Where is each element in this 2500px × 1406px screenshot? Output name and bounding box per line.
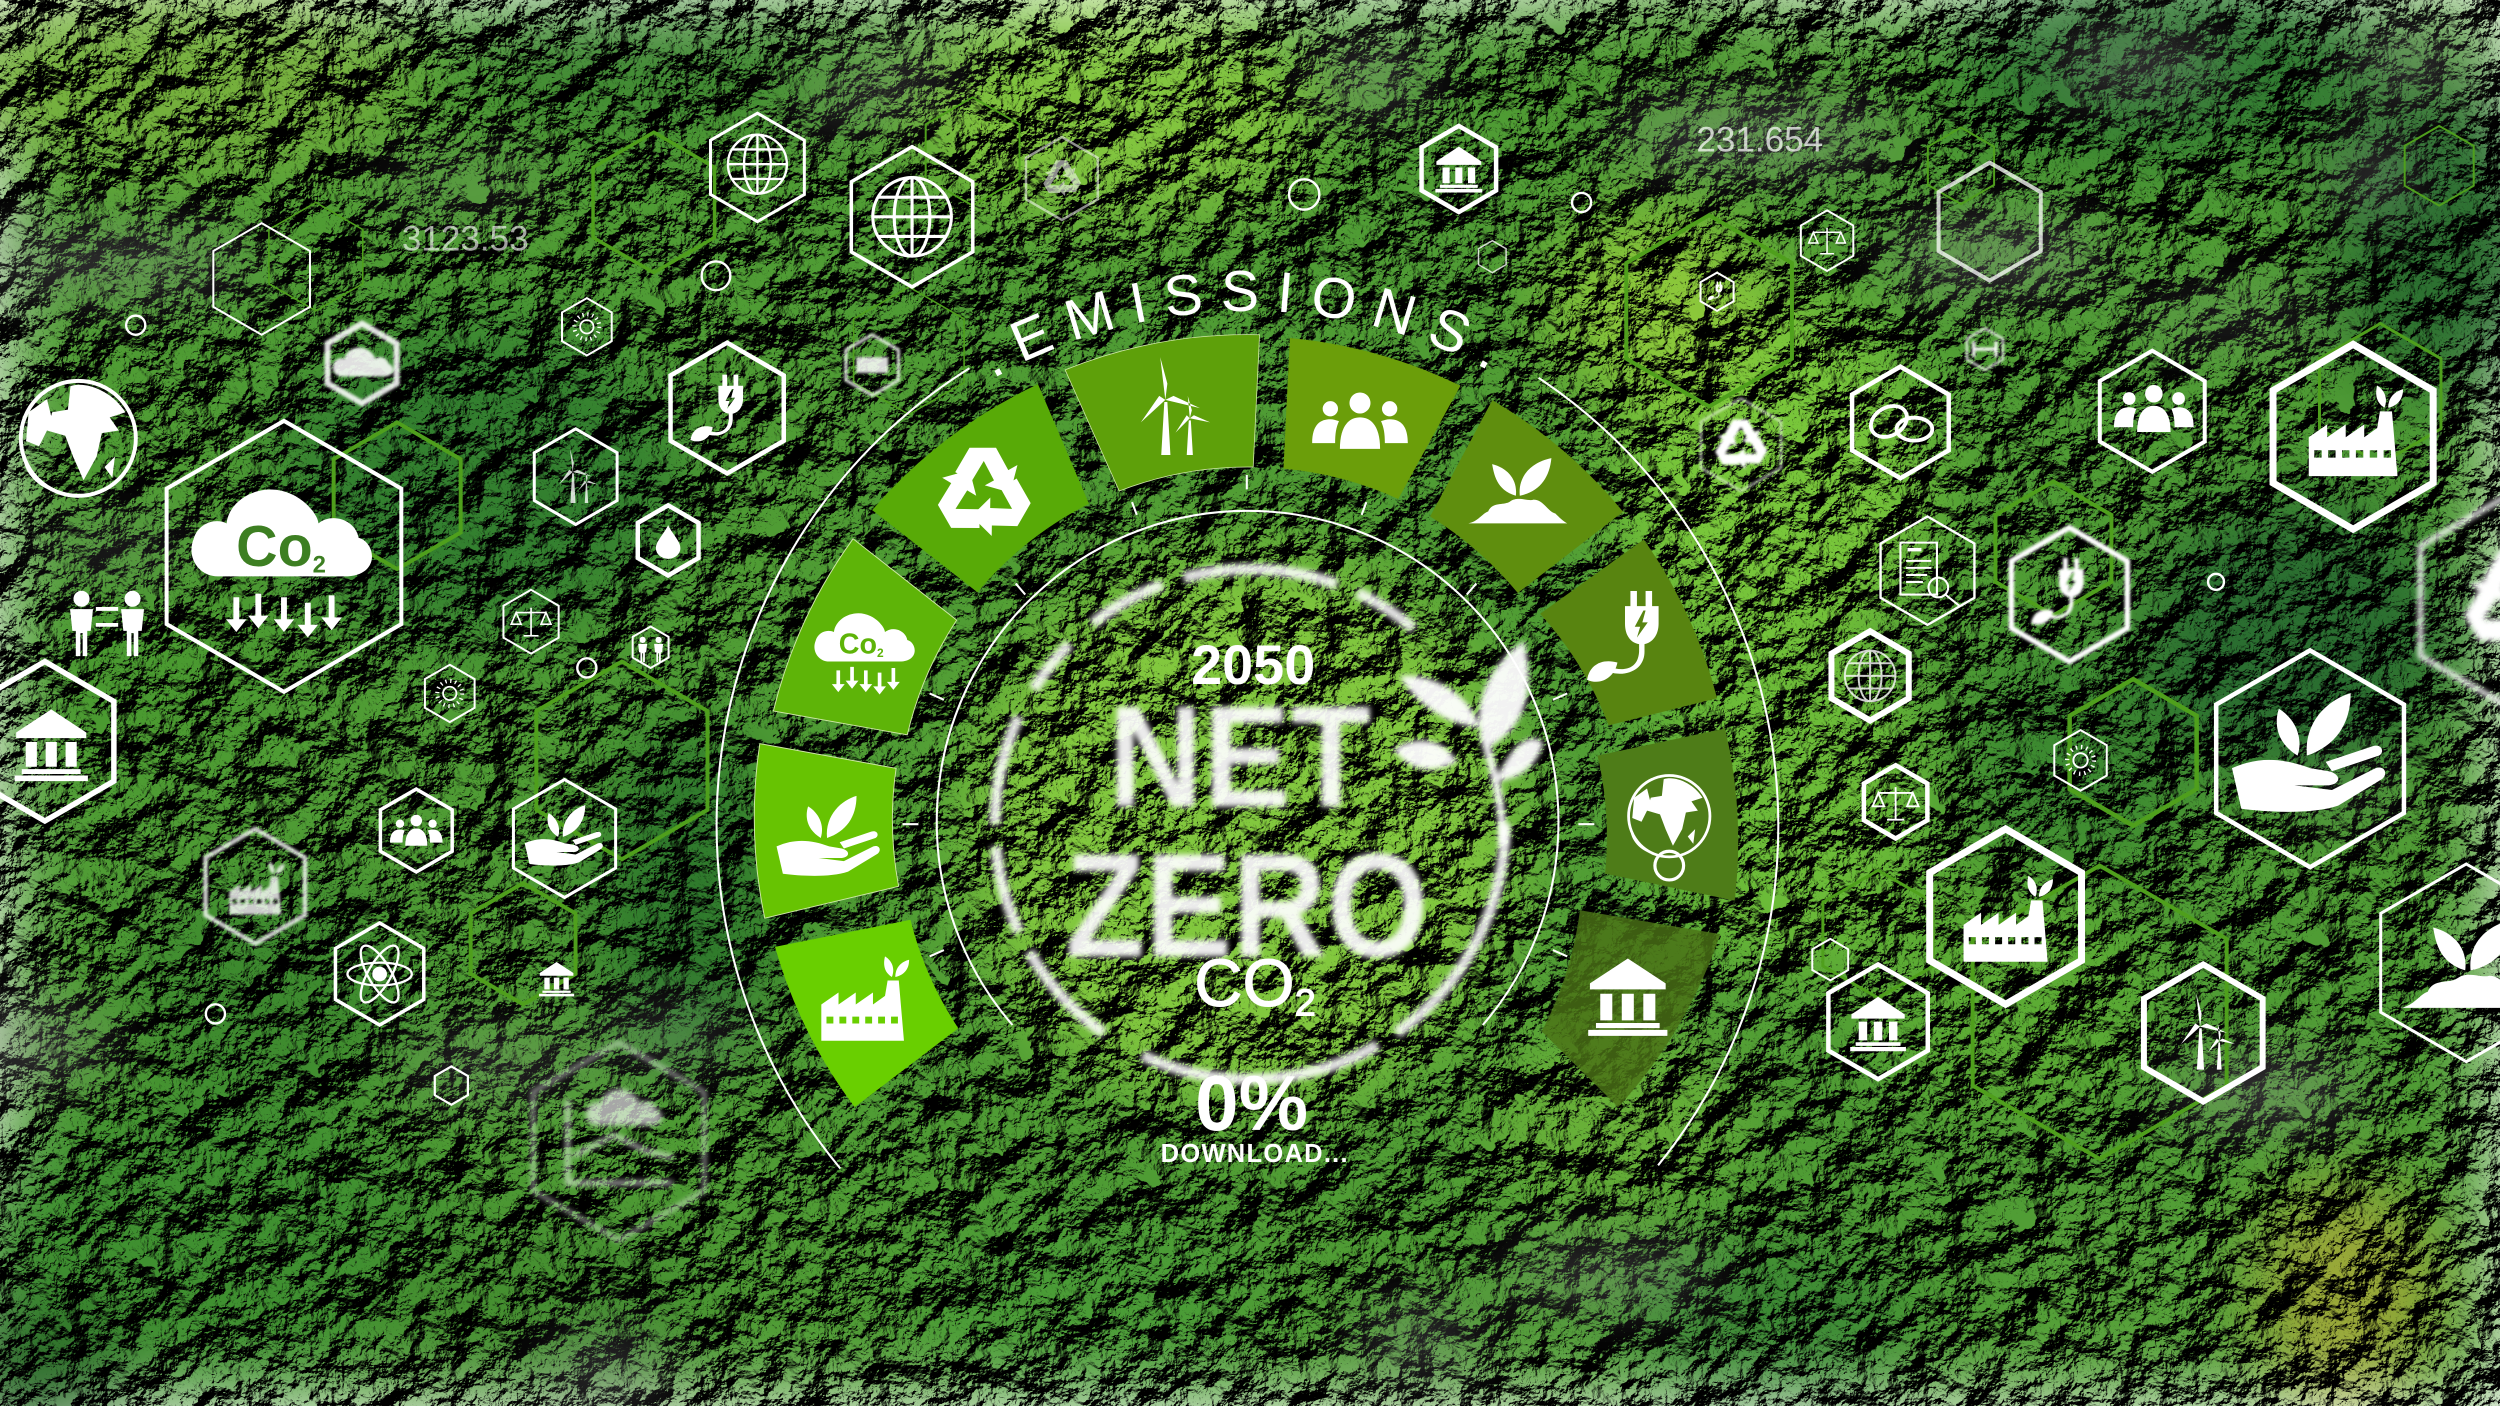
hexagon: wire globe [851,147,973,287]
hexagon: factory upper right [2273,344,2433,529]
hexagon: hand with leaves right [2216,650,2404,867]
hexagon: wire globe right [1831,631,1909,721]
segment: CO2 cloud [773,539,957,735]
hexagon: scale left [503,590,559,654]
hexagon: blurred cloud [328,324,397,403]
hexagon: water drop [638,505,699,575]
hexagon: tiny dumbbell [1967,328,2003,370]
title: 2050: 2050 [1191,633,1315,696]
hexagon: document inspection [1881,516,1974,625]
segment: recycling [872,384,1089,592]
blurred dashed ring around Net Zero [995,569,1505,1079]
segment: bank, semi transparent [1542,910,1720,1107]
hexagon: tiny sprout plug [1701,273,1734,311]
segment: CO2 cloud: 2 [877,646,884,660]
title: NET: NET [1108,676,1371,838]
hexagon: blurred recycling far right [2420,491,2500,711]
hexagon: bank top [1422,126,1496,212]
icon: globe on the left [21,381,136,496]
hexagon: people left [380,789,452,872]
number: 231.654: 231.654 [1696,120,1823,159]
hexagon: factory lower right [1930,829,2082,1004]
segment: CO2 cloud: Co [839,629,877,661]
outer thin ring [717,368,1778,1168]
title: CO2: 2 [1295,981,1316,1024]
hexagon: large CO2 cloud: 2 [313,551,326,578]
hexagon: large CO2 cloud [167,421,401,692]
segment: factory [775,920,958,1107]
hexagon: small plain right [1812,939,1848,980]
hexagon: bank left [0,662,114,821]
segment: globe [1598,729,1738,901]
segment: people [1283,338,1460,499]
number: 3123.53: 3123.53 [402,219,529,258]
hexagon: small plain lower left [435,1066,468,1105]
hexagon: sun small [562,298,612,355]
title: CO2: CO [1194,946,1295,1021]
segment: wind turbines [1065,335,1260,491]
hexagon: plant in soil far right [2381,864,2500,1062]
hexagon: bank right [1828,964,1928,1079]
hexagon: scale upper right [1801,210,1853,271]
segment: eco plug [1540,539,1717,725]
inner thin ring with tick marks [902,475,1594,1025]
hexagon: tiny top [1478,241,1506,273]
hexagon: blurred plug [2011,528,2127,662]
icon: small bank lower left [539,962,574,996]
hexagon: hand with leaves left [513,780,616,897]
hexagon: blurred small device [846,335,898,395]
hexagon: people right [2100,351,2205,472]
caption: download: DOWNLOAD... [1161,1140,1349,1168]
hexagon: plain upper left [213,223,310,335]
hexagon: blurred CO2 chart [533,1043,704,1240]
title: 0 percent: 0% [1195,1059,1308,1147]
hexagon: eco plug [671,343,784,473]
green background hexagons [269,97,2474,1159]
heading: EMISSIONS on a curve: .EMISSIONS. [994,270,1488,376]
icon: two people with exchange arrows [70,591,144,656]
hexagon: faint ring upper right [1939,163,2041,281]
hexagon: globe with leaves [710,113,804,222]
blurred sprout icon [1393,641,1543,845]
hexagon: sun [425,665,475,722]
hexagon: coins [1852,367,1949,478]
title: ZERO: ZERO [1065,823,1429,988]
hexagon: sun right [2054,730,2107,791]
segment: hand with leaves [754,744,899,918]
hexagon: scale right [1864,765,1927,838]
small circles [126,179,2224,1023]
hexagon: blurred factory [206,829,305,944]
hexagon: atom [335,923,424,1025]
hexagon: blurred recycling [1701,399,1781,491]
hexagon: tiny people [633,626,669,668]
segment: plant in soil [1430,400,1623,593]
hexagon: wind turbine [534,429,617,524]
hexagon: wind turbine right [2144,964,2263,1102]
hexagon: large CO2 cloud: Co [236,515,313,579]
hexagon: faint cap [1026,137,1098,220]
